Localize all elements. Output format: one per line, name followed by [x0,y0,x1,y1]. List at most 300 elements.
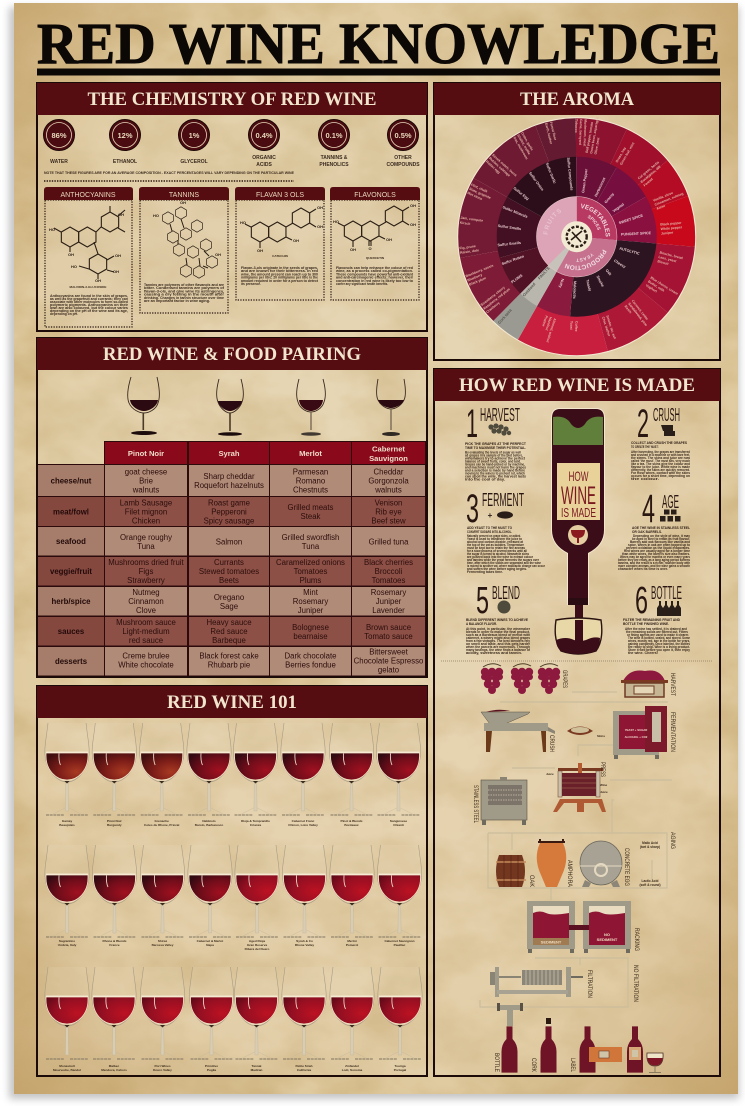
row: sauces: Brown sauce [366,623,411,632]
outer ring descriptors: Blue cheese, cream [650,276,679,296]
card: flavonols: wine, as a process called co-pigmentation. [335,269,413,273]
glass 19 [140,967,185,1072]
row: meat/fowl: Filet mignon [125,508,167,516]
outer ring descriptors: Yoghurt [645,283,659,294]
outer ring descriptors: Anise [656,204,666,211]
outer ring descriptors: Almond, walnut [545,318,557,344]
glass 3 [139,723,184,827]
glass 16 [377,845,422,947]
aging labels: Lactic Acid [642,879,658,883]
step 2 crush: 2 [637,402,649,446]
glass 19: Douro Valley [153,1068,172,1072]
row: cheese/nut: Romano [296,476,326,486]
card: tannins: TANNINS [169,192,199,199]
step 4 age: before they are ready, as a long aging period softens [618,558,690,562]
crusher [481,710,555,752]
row: seafood: Salmon [216,538,242,546]
step 1 harvest: 1 [466,402,478,446]
molecule: tannin polymer: OH [215,252,221,257]
row: desserts: Creme brulee [122,652,170,660]
glass 2: Burgundy [107,823,122,827]
row: cheese/nut: walnuts [132,486,159,495]
bottle: cork [530,1018,556,1073]
panel: the aroma [433,82,721,361]
molecule: tannin polymer [153,200,221,278]
glass 4 [187,723,231,827]
outer ring descriptors: Gas, mushroom [512,136,529,160]
step 1 harvest: PICK THE GRAPES AT THE PERFECT [465,442,527,446]
row: sauces: Mushroom sauce [116,618,176,627]
glass 24: Portugal [394,1068,406,1072]
outer ring descriptors: Struck match, burnt [491,153,518,178]
row: desserts: Rhubarb pie [208,660,250,670]
card: flavan 3 ols: milligrams per litre; 20 milligrams per litre is the [241,276,318,280]
row: cheese/nut: walnuts [374,486,402,495]
panel: the chemistry of red wine [37,83,427,331]
aging labels: (tart & sharp) [640,845,660,849]
oak barrel: OAK [528,875,534,887]
stat: glycerol [178,120,210,165]
aroma wheel: YEAST [576,254,594,262]
stat: other compounds: 0.5% [394,131,412,140]
step 4 age: tannins, and the result is a richer, rounder body with [618,561,690,565]
panel: the aroma: THE AROMA [520,89,634,110]
card: flavan 3 ols: and are known for their bitterness. In red [241,269,318,273]
step 5 blend: A BALANCE FLAVOR. [466,622,497,626]
outer ring descriptors: Earth, leather [544,123,553,145]
stat: tannins and phenolics: TANNINS & [321,155,348,161]
bottle label: HOW [568,468,589,484]
step 2 crush: differently, the skins are quickly removed. [631,468,690,472]
molecule: malvidin: OH [118,212,124,217]
aroma wheel: Sulfur Garlic [545,162,557,184]
concrete egg [580,841,629,887]
bottle: label [569,1026,622,1073]
step 1 harvest: Grapes can be hand-picked or by machine, [465,462,525,466]
glass 13 [235,845,279,951]
glass 13: Ribera del Duero [245,947,269,951]
step 2 crush: flavour to the juice. White wine is made [631,465,690,469]
step 1 harvest: into the cool of day. [465,478,505,482]
card: anthocyanins: Anthocyanins are found in the skin of grapes, [50,294,128,298]
step 6 bottle: Store it well before you open it, then enjoy [628,648,690,652]
wine press: Juice [546,772,554,776]
pairing table [38,441,426,676]
glass 23 [330,967,374,1072]
card: flavonols: confer any significant health benefits. [336,282,388,286]
outer ring descriptors: Toast [569,321,573,331]
glass 17 [45,967,89,1072]
glass 18: Malbec [109,1064,120,1068]
row: seafood: Tuna [137,542,155,551]
aroma wheel: Smoke [595,275,605,288]
row: veggie/fruit: Black cherries [364,558,413,567]
glass 14: Rhone Valley [295,943,314,947]
outer ring descriptors [459,115,686,344]
step 6 bottle: are ready to ship. Wine is a living product. [628,645,690,649]
glass 2: Pinot Noir [107,819,122,823]
card: flavonols: QUERCETIN [366,256,385,260]
aging labels: Malic Acid [642,841,658,845]
row: cheese/nut: Sharp cheddar [203,472,255,481]
step 1 harvest: can spoil the wine, the harvest lasts [465,474,526,478]
aroma wheel: Green Pepper [581,168,589,193]
panel: red wine 101 [37,686,427,1076]
molecule: quercetin: OH [410,203,416,208]
bottling line [493,1003,663,1073]
outer ring descriptors: Juniper [661,231,674,236]
glass 8: Chianti [393,823,404,827]
card: flavonols: and anti-carcinogenic effects; however, their [336,276,414,280]
glass 20 [189,967,234,1072]
bottle: filling [493,1003,523,1073]
step 4 age: Depending on the style of wine, it may [633,534,690,538]
glass 15 [330,845,374,947]
glass 9: Umbria, Italy [58,943,77,947]
step 4 age [618,487,691,571]
outer ring descriptors: Forest floor [549,121,558,141]
step 3 ferment: and tannins while the yeast ferments the sugars over [467,558,540,562]
glass 4: Barolo, Barbaresco [195,823,223,827]
row: meat/fowl: Pepperoni [211,508,247,516]
row: herb/spice: Mint [303,588,319,597]
card: flavan 3 ols: CATECHIN [272,254,289,258]
step 1 harvest: balance of sweet fruits, color, and acid. [465,460,521,464]
glass 24: Touriga [394,1064,406,1068]
panel: red wine and food pairing [37,338,427,677]
step 6 bottle: FILTER THE REMAINING FRUIT AND [623,618,680,622]
step 5 blend: At this point, in particular, the winemaker [466,627,531,631]
aroma wheel: Oxidised [521,281,537,297]
row: cheese/nut: Parmesan [293,467,328,476]
outer ring descriptors: Cut grass, herbs [637,160,660,180]
stat: water: 86% [51,131,67,140]
racking tanks: NO [604,932,610,937]
outer ring descriptors: Kirsch [460,221,471,226]
row: herb/spice: herb/spice [52,597,91,606]
outer ring descriptors: Fig, prune [459,244,476,250]
table header: Sauvignon [369,454,408,463]
row: desserts: gelato [378,666,400,674]
outer ring descriptors: Resin [624,305,632,314]
aroma wheel: Oak [605,268,613,277]
row: cheese/nut: Chestnuts [293,486,328,495]
table header: Cabernet [372,444,405,454]
glass 22 [282,967,326,1072]
step 4 age: more complex aromas, and the wine gains a smooth [618,564,690,568]
outer ring descriptors: Olive, beet [594,136,601,155]
row: herb/spice: Cinnamon [128,597,164,606]
molecule: malvidin: HO [71,264,77,269]
card: flavan 3 ols: wine, the amount present can reach up to 300 [240,272,318,276]
step 2 crush: COLLECT AND CRUSH THE GRAPES [631,441,688,445]
aroma wheel: FRUITS [543,208,561,234]
step 5 blend: acidity, sweetness and tannin. [466,651,522,655]
row: seafood: Grilled tuna [369,538,409,546]
receiving glass [555,618,602,654]
grapes [481,664,567,694]
card: flavonols: These compounds have powerful anti-oxidant [336,272,414,276]
panel: how red wine is made: HOW RED WINE IS MADE [459,375,695,396]
outer ring descriptors: Eucalyptus, dill [640,165,662,184]
step 5 blend: BLEND [492,583,520,603]
row: sauces: Red sauce [210,627,248,636]
outer ring descriptors: Blackberry, cassis [465,263,494,278]
glass 1: Beaujolais [59,823,75,827]
glass 18: Mendoza, Cahors [101,1068,127,1072]
aroma wheel: VEGETABLES [581,204,610,237]
molecule: quercetin: OH [350,247,356,252]
row: cheese/nut [38,465,425,496]
card: anthocyanins: as well as the grapefruit and currants; they can [50,297,128,301]
row: sauces: Barbeque [212,636,246,645]
glass 7 [329,723,374,827]
glass 18 [92,967,136,1072]
glass 5: Crianza [250,823,261,827]
row: seafood: Tuna [302,542,320,551]
molecule: quercetin [333,203,416,252]
row: meat/fowl [38,497,425,526]
row: sauces: sauces [58,627,85,636]
step 3 ferment: CONVERT SUGARS INTO ALCOHOL. [467,530,512,534]
molecule: quercetin: OH [386,237,392,242]
outer ring descriptors: Rubber, cabbage [488,156,511,178]
card: tannins [139,187,229,313]
card: tannins: bitter. Condensed tannins are polymers of [144,286,225,290]
molecule: catechin: OH [317,205,323,210]
stat: ethanol: 12% [117,131,133,140]
outer ring descriptors: Wet stone [467,191,483,201]
row: meat/fowl: Roast game [208,498,250,507]
outer ring descriptors: Green leaf, mint [619,141,636,166]
row: herb/spice: Nutmeg [132,588,160,597]
filtration machine [490,965,638,1002]
wine press: PRESS [599,762,605,777]
outer ring descriptors: Brioche, bread [659,251,683,260]
row: herb/spice [38,587,425,616]
step 6 bottle: The wine is bottled, sealed, and stored. Some [628,636,690,640]
outer ring descriptors: Fennel [643,177,654,187]
outer ring descriptors: Coffee [574,321,578,332]
glass 1: Gamay [62,819,72,823]
glasses row 1 [45,723,421,827]
row: desserts [38,647,425,676]
step 3 ferment: Yeast is used to transform the juice to [467,537,522,541]
glass 7: Pinot & Blends [340,819,363,823]
glass 13: Gran Reserva [247,943,267,947]
glass 6 [281,723,325,827]
step 6 bottle: the remaining solids are filtered out. Filters [626,630,688,634]
step 5 blend: cabernet, a winery might also blend grapes [466,636,530,640]
row: sauces [38,617,425,646]
step 4 age: character when its time is over. [618,567,668,571]
row: sauces: red sauce [129,636,163,645]
table header [105,442,425,464]
row: cheese/nut: Cheddar [374,467,404,476]
outer ring descriptors: Strawberry, cherry [480,286,506,307]
step 1 harvest: By evaluating the levels of sugar as well [465,450,521,454]
step 5 blend: from a few vintages. The best blenders rely [466,639,530,643]
aroma wheel: Sulfur Minerals [502,205,528,219]
glass 24 [378,967,422,1072]
icon: barrel end [498,600,510,614]
card: anthocyanins: own are also coloured, but the colour varies [50,306,128,310]
fermentation tank: YEAST + SUGAR [625,728,647,732]
molecule: malvidin: OH [68,252,74,257]
row: seafood [38,527,425,556]
outer ring descriptors: Vanilla, clove [652,191,674,203]
glass 20: Primitivo [205,1064,218,1068]
step 3 ferment: Fermenting takes time. [467,570,503,574]
glass 20: Puglia [207,1068,216,1072]
glass 3: Grenache [155,819,169,823]
step 6 bottle: or fining agents are used to make it clearer. [627,633,689,637]
amphora [537,839,572,887]
step 4 age: spice. Wines in oak are often topped up to [628,543,690,547]
glass 14 [282,845,327,947]
pour stream [575,605,583,643]
row: veggie/fruit: Beets [219,576,239,585]
card: anthocyanins: depending on pH. [50,312,78,316]
title: RED WINE KNOWLEDGE [37,11,720,76]
molecule: catechin: HO [240,220,246,225]
outer ring descriptors: Lees, yeast [658,255,678,263]
step 6 bottle: wines, mostly red, age in the bottle for years, [627,639,690,643]
aroma wheel: PRODUCTION [564,250,606,270]
step 3 ferment: 3 [466,487,479,531]
row: veggie/fruit: Caramelized onions [276,558,345,567]
racking tanks: RACKING [633,928,639,951]
panel: red wine and food pairing: RED WINE & FOOD PAIRING [103,344,361,365]
note: NOTE THAT THESE FIGURES ARE FOR AN AVERAGE COMPOSITION - EXACT PERCENTAGES WILL VARY DEPENDING ON THE PARTICULAR WINE [44,171,294,175]
step 4 age: AGE [662,492,679,512]
stat: ethanol [110,120,140,165]
row: desserts: Dark chocolate [284,652,337,660]
row: desserts: Chocolate Espresso [354,656,424,666]
row: herb/spice: Lavender [372,606,405,615]
step 2 crush: the colour. [631,477,659,481]
row: veggie/fruit: Strawberry [127,576,165,585]
table header: Pinot Noir [128,449,164,458]
row: meat/fowl: Spicy sausage [204,517,254,526]
step 3 ferment [466,487,546,574]
card: tannins: Tannins are polymers of other flavanols and are [144,283,224,287]
glass 9: Sagrantino [59,939,75,943]
outer ring descriptors: Slate, graphite [468,187,492,200]
row: sauces: Bolognese [292,623,329,632]
row: meat/fowl: Venison [375,498,402,507]
molecule: tannin polymer: HO [153,213,159,218]
outer ring descriptors: White pepper [660,225,683,231]
row: meat/fowl: Lamb Sausage [120,498,172,507]
step 2 crush: CRUSH [653,405,680,425]
step 1 harvest: as grapes in a sample of the plot before, [465,454,523,458]
glass 14: Syrah & Co [296,939,313,943]
row: herb/spice: Sage [220,602,238,611]
step 4 age: AGE THE WINE IN STAINLESS STEEL [632,526,691,530]
step 3 ferment: and soften the wine before aging begins. [467,567,527,571]
glass 21 [234,967,279,1072]
outer ring descriptors: Game, barnyard [578,119,583,145]
aroma wheel: Sulfur Egg [512,186,530,201]
racking tanks [527,901,639,953]
step 1 harvest: and a selection is made by hand before [465,468,525,472]
step 3 ferment: for a slow process of several weeks until all [467,549,527,553]
glasses row 2 [45,845,422,951]
card: flavonols [330,187,420,300]
glass 12: Napa [206,943,214,947]
wine press [546,762,608,812]
step 5 blend: blends in order to make the final product, [466,630,530,634]
step 1 harvest: winemakers try to achieve the perfect [464,456,526,460]
stat: other compounds [386,120,420,168]
outer ring descriptors: Tobacco [574,119,579,133]
molecule: catechin: OH [257,248,263,253]
outer ring descriptors: Black plum [468,276,487,287]
stat: glycerol: GLYCEROL [180,159,208,165]
stat: ethanol: ETHANOL [113,159,137,165]
stat: glycerol: 1% [189,131,200,140]
step 6 bottle: gaining complexity. Once labelled, the bottles [628,642,690,646]
aroma wheel: SWEET SPICE [618,213,644,225]
glass 3: Cotes du Rhone, Priorat [144,823,179,827]
step 3 ferment: is moved to another vat, where malolactic change can occur [467,564,546,568]
card: flavan 3 ols [235,187,325,300]
outer ring descriptors: Coconut, cedar [631,299,649,321]
stat: tannins and phenolics [318,120,350,168]
glass 13: Aged Rioja [249,939,265,943]
stat: other compounds: COMPOUNDS [386,162,420,168]
step 4 age: 4 [642,487,655,531]
stainless steel tank: STAINLESS STEEL [472,785,478,823]
glass 16: Cabernet Sauvignon [384,939,415,943]
outer ring descriptors: Butter, milk [647,280,665,293]
filtration machine: FILTRATION [586,970,592,998]
molecule: malvidin: HO [49,227,55,232]
step 2 crush: the stems. The skins and juice are now [631,456,690,460]
glass 17: Monastrell [59,1064,75,1068]
step 3 ferment: time, after which the solids are separated and the wine [467,561,541,565]
glass 22: California [297,1068,311,1072]
outer ring descriptors: Jam, compote [460,216,483,223]
glass 16: Pauillac [394,943,406,947]
stat: water: WATER [50,159,68,165]
step 5 blend [465,580,531,655]
step 1 harvest: TIME TO MAXIMISE THEIR POTENTIAL. [465,446,526,450]
step 4 age: OR OAK BARRELS. [632,530,662,534]
row: herb/spice: Oregano [214,593,245,602]
bottle medallion [568,525,588,545]
wine press: Juice [600,790,608,794]
step 6 bottle [623,580,690,655]
grapes: GRAPES [561,670,567,688]
row: veggie/fruit: Stewed tomatoes [199,567,259,576]
step 6 bottle: 6 [635,580,648,622]
card: anthocyanins [44,187,133,327]
step 5 blend: such as a Bordeaux blend of merlot with [466,633,530,637]
step 5 blend: when the parcels are numerous. Through [465,645,530,649]
outer ring descriptors: Flint, chalk [470,183,488,194]
card: flavan 3 ols: Flavan-3-ols originate in the seeds of grapes, [241,266,318,270]
glasses row 3 [45,967,422,1072]
wine press: Wine [600,783,607,787]
aroma wheel: Sulfur Smells [497,241,521,247]
aroma wheel: Sulfur Compounds [566,157,574,191]
stat: tannins and phenolics: 0.1% [325,131,343,140]
row: herb/spice: Juniper [376,597,402,606]
outer ring descriptors: Green bean, asparagus [589,116,600,154]
bottle pouring wine [552,409,604,654]
